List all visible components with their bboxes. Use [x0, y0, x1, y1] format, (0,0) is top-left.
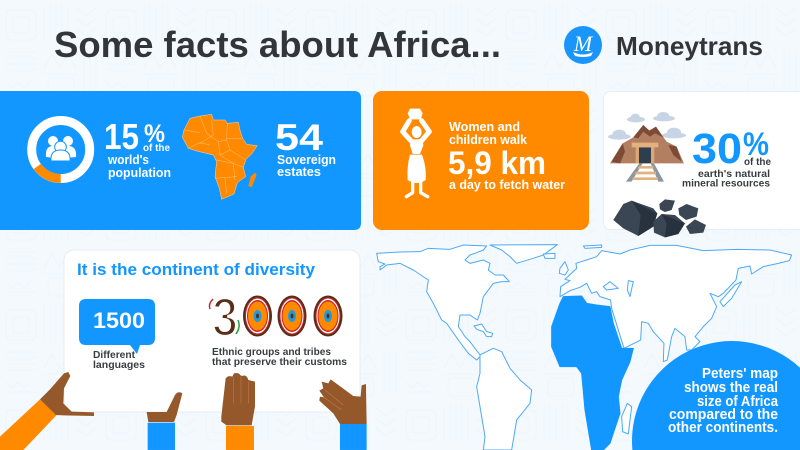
- speech bubble: 1500: [79, 299, 155, 354]
- illustration: mine: [608, 112, 686, 182]
- madagascar: [622, 403, 632, 434]
- brand name: Moneytrans: [616, 31, 763, 61]
- map: Peters projection world: [377, 245, 792, 450]
- callout: Peters' map: compared to the: [669, 407, 778, 423]
- callout: Peters' map: shows the real: [684, 380, 778, 396]
- caribbean islands: [474, 324, 493, 337]
- text: women and children walk: [448, 119, 565, 192]
- stat: 54 sovereign estates: estates: [277, 164, 321, 179]
- inland seas: [603, 281, 633, 297]
- text: women and children walk: Women and: [449, 119, 520, 134]
- heading: It is the continent of diversity: [77, 260, 316, 279]
- eurasia: [560, 245, 792, 362]
- icon: Moneytrans badge: M: [573, 31, 594, 56]
- icon: people: [46, 136, 76, 161]
- callout: Peters' map: size of Africa: [697, 394, 779, 410]
- stat: 54 sovereign estates: 54: [275, 117, 323, 158]
- figure: 3000 with shields as zeros: 3: [212, 286, 238, 348]
- panel: water walk: [373, 91, 589, 230]
- callout: Peters' map: other continents.: [668, 420, 778, 436]
- stat: 30% of the earth's natural mineral resources: [682, 125, 771, 190]
- iceland and north islands: [543, 245, 602, 258]
- icon: Moneytrans badge: [564, 26, 602, 64]
- text: women and children walk: a day to fetch water: [449, 177, 565, 192]
- callout: Peters' map: [632, 341, 800, 450]
- callout: Peters' map: Peters' map: [702, 366, 778, 382]
- speech bubble: 1500: 1500: [93, 308, 145, 333]
- text: ethnic groups: that preserve their customs: [212, 356, 347, 368]
- stat: 54 sovereign estates: Sovereign: [277, 152, 336, 167]
- text: ethnic groups: [212, 346, 347, 368]
- stat: 15% of the world's population: world's: [107, 152, 149, 167]
- illustration: coal: [613, 199, 706, 237]
- stat: 30% of the earth's natural mineral resources: %: [743, 126, 769, 162]
- south america: [477, 348, 532, 450]
- map: Africa countries: [182, 114, 257, 199]
- hand: third: [221, 373, 255, 450]
- text: different languages: Different: [93, 349, 135, 361]
- panel: population and estates: [0, 91, 361, 230]
- logo: Moneytrans: [564, 26, 763, 64]
- text: ethnic groups: Ethnic groups and tribes: [212, 346, 331, 358]
- british isles: [559, 262, 568, 275]
- figure: 3000 with shields as zeros: [209, 286, 342, 348]
- stat: 15% of the world's population: 15: [104, 116, 139, 157]
- greenland: [490, 245, 557, 263]
- icon: woman carrying water pot: [403, 109, 429, 197]
- japan and far east islands: [720, 282, 742, 307]
- stat: 30% of the earth's natural mineral resources: 30: [692, 125, 742, 173]
- text: women and children walk: children walk: [449, 132, 528, 147]
- text: different languages: languages: [93, 359, 145, 371]
- stat: 30% of the earth's natural mineral resources: earth's natural: [698, 168, 770, 180]
- hands holding the panel: [0, 372, 367, 450]
- hand: second: [147, 392, 182, 450]
- stat: 15% of the world's population: of the: [143, 142, 170, 154]
- stat: 15% of the world's population: [104, 116, 171, 180]
- africa highlighted: [552, 296, 633, 450]
- text: different languages: [93, 349, 145, 371]
- stat: 15% of the world's population: population: [108, 165, 171, 180]
- stat: 54 sovereign estates: [275, 117, 336, 179]
- panel: mineral resources: [604, 92, 800, 230]
- panel: continent of diversity: [64, 250, 360, 412]
- text: women and children walk: 5,9 km: [448, 145, 546, 181]
- hand: left: [0, 372, 94, 450]
- donut chart: 15% of population: [32, 120, 90, 178]
- north america: [377, 245, 509, 360]
- stat: 15% of the world's population: %: [144, 120, 165, 148]
- hand: fourth: [319, 379, 367, 450]
- title: Some facts about Africa...: [54, 24, 501, 65]
- stat: 30% of the earth's natural mineral resources: of the: [744, 156, 771, 168]
- stat: 30% of the earth's natural mineral resources: mineral resources: [682, 178, 770, 190]
